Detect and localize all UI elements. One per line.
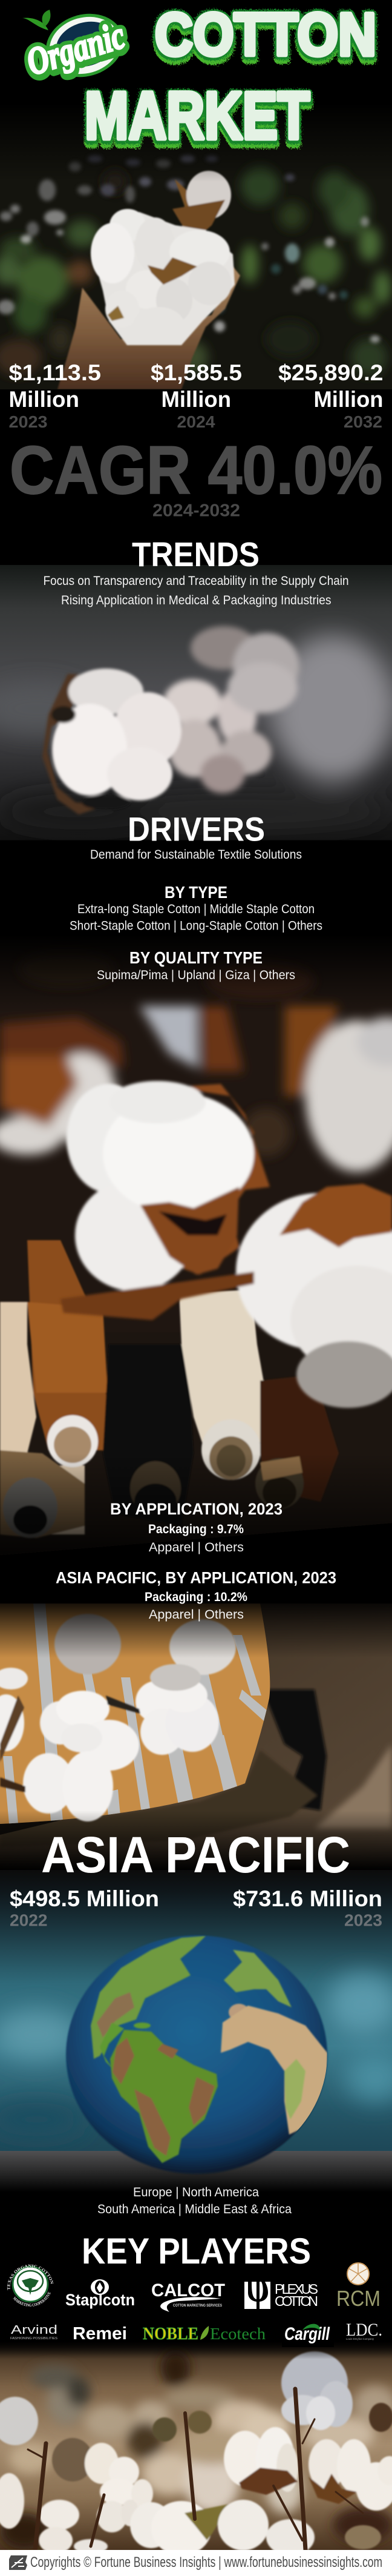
segment: by quality type: Supima/Pima | Upland | Giza | Others [97,968,295,982]
stat: 2032 value: 2032 [344,412,382,431]
stat: Asia Pacific 2022 [10,1886,159,1929]
photo: hand holding cotton in field [0,135,392,389]
logo: RCM: RCM [336,2286,381,2311]
stat: 2023 value: $1,113.5 [8,360,101,385]
segment: by type: BY TYPE [165,883,227,902]
logo: Organic badge: Organic [22,13,129,84]
segment: by quality type: BY QUALITY TYPE [129,948,263,967]
logo: Plexus Cotton: COTTON [275,2293,318,2309]
knitted globe [66,1935,327,2174]
stat: 2032 value: Million [313,386,384,412]
spools [0,1302,85,1534]
title: COTTON MARKET: MARKET [85,80,310,154]
logo: Arvind: Arvind [11,2323,57,2337]
logo: Texas Organic Cotton [7,2265,53,2307]
stat: 2023 value [8,360,101,431]
stat: 2023 value: Million [8,386,79,412]
stat: Asia Pacific 2023: $731.6 Million [233,1886,382,1911]
logo: Noble Ecotech: NOBLE [143,2325,198,2343]
logo: Calcot: COTTON MARKETING SERVICES [173,2304,223,2308]
trends list: Focus on Transparency and Traceability in the Supply Chain [44,573,348,588]
logo: LDC: Louis Dreyfus Company [346,2337,374,2340]
footer bar [0,2550,392,2576]
drivers text: Demand for Sustainable Textile Solutions [90,847,302,862]
logo: Arvind: FASHIONING POSSIBILITIES [10,2337,58,2340]
stat: 2024 value: $1,585.5 [151,360,242,385]
heading: DRIVERS: DRIVERS [128,810,265,848]
logo: Calcot: CALCOT [151,2280,225,2300]
photo: sunlit cotton field [0,2341,392,2555]
logo: Remei: Remei [73,2324,127,2343]
stat: Asia Pacific 2023 [233,1886,382,1929]
segment: Asia Pacific by application: Apparel | Others [149,1607,244,1622]
segment: by type [70,883,322,933]
africa [221,2006,327,2135]
stat: Asia Pacific 2023: 2023 [344,1911,382,1929]
segment: by application 2023: Apparel | Others [149,1540,244,1554]
regions list [97,2185,292,2216]
stat: 2024 value: 2024 [177,412,215,431]
segment: by type: Short-Staple Cotton | Long-Staple Cotton | Others [70,918,322,933]
logos: key players [7,2262,382,2347]
title: COTTON MARKET [85,1,376,158]
segment: by quality type [97,948,295,982]
regions list: Europe | North America [133,2185,259,2199]
stat: 2024 value [151,360,242,431]
cotton bolls in hand [91,171,235,345]
trends list [44,573,348,607]
logo: RCM [336,2263,381,2311]
logo: Staplcotn [65,2279,135,2309]
globe scene background [0,1870,392,2192]
CAGR callout: 2024-2032 [152,501,240,521]
segment: by type: Extra-long Staple Cotton | Middle Staple Cotton [77,902,315,916]
heading: TRENDS: TRENDS [132,535,260,574]
regions list: South America | Middle East & Africa [97,2202,292,2216]
europe [224,1950,292,2007]
trends list: Rising Application in Medical & Packaging Industries [61,593,332,607]
stat: 2032 value [278,360,384,431]
stat: 2032 value: $25,890.2 [278,360,384,385]
title: COTTON MARKET: MARKET [85,79,310,153]
striped cloth [0,1603,278,1834]
logo: Plexus Cotton: PLEXUS [275,2281,318,2297]
photo: cotton bolls on grey fabric [0,565,392,841]
logo: Noble Ecotech: Ecotech [210,2325,266,2343]
stat: Asia Pacific 2022: 2022 [10,1911,47,1929]
logo: LDC: LDC. [346,2320,382,2340]
logo: Cargill: Cargill [284,2324,330,2344]
logo: Staplcotn: Staplcotn [65,2291,135,2309]
logo: Organic badge: Organic [22,15,130,85]
logo: Texas Organic Cotton: TEXAS ORGANIC COTTON [7,2265,53,2290]
hand [57,266,240,389]
logo: Plexus Cotton [244,2281,318,2309]
title: COTTON MARKET: MARKET [85,84,310,158]
photo: cotton bolls and thread spools [0,934,392,1558]
logo: Arvind [10,2323,58,2340]
logo: Texas Organic Cotton: MARKETING COOPERATIVE [13,2291,51,2307]
stat: Asia Pacific 2022: $498.5 Million [10,1886,159,1911]
segment: Asia Pacific by application [56,1568,336,1622]
photo: cotton on striped cloth and burlap [0,1603,392,1870]
segment: by application 2023: Packaging : 9.7% [148,1522,244,1536]
heading: KEY PLAYERS: KEY PLAYERS [82,2231,311,2271]
icon: Fortune Business Insights mark [9,2555,27,2570]
segment: by application 2023 [110,1500,283,1554]
north america [91,1936,206,2059]
segment: Asia Pacific by application: ASIA PACIFIC, BY APPLICATION, 2023 [56,1568,336,1587]
segment: Asia Pacific by application: Packaging : 10.2% [145,1590,247,1604]
segment: by application 2023: BY APPLICATION, 2023 [110,1500,283,1518]
south america [110,2030,218,2163]
top fade over field photo [0,103,392,182]
stat: 2024 value: Million [161,386,231,412]
logo: Calcot [151,2280,225,2312]
logo: Cargill [282,2318,334,2347]
stat: 2023 value: 2023 [8,412,47,431]
heading: ASIA PACIFIC: ASIA PACIFIC [41,1826,350,1883]
logo: Noble Ecotech [143,2325,266,2343]
